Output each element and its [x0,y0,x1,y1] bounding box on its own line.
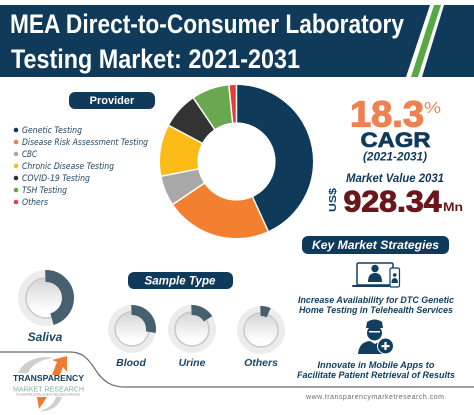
legend: provider [14,126,149,208]
heading: sample type [128,272,233,289]
stat: CAGR: 18.3 [350,94,424,134]
legend: provider: Genetic Testing [22,126,83,136]
legend: provider: COVID-19 Testing [22,174,91,184]
legend: provider: Others [22,198,49,208]
heading: key market strategies [302,236,449,254]
donut chart: provider share [159,83,294,233]
text: strategy two: Innovate in Mobile Apps to [318,360,435,371]
heading: provider: Provider [90,95,135,107]
stat: CAGR: CAGR [360,129,430,152]
heading: sample type: Sample Type [144,274,216,288]
icon: patient with plus badge [358,320,394,354]
logo: transparency market research [13,356,85,411]
text: strategy one: Increase Availability for DTC Genetic [298,295,455,306]
icon: telehealth laptop and phone [352,263,400,287]
gauge: blood [108,305,156,369]
gauge: others: Others [244,357,278,369]
title: Testing Market: 2021-2031 [11,44,300,74]
logo: transparency market research: TO INSPIRE INTELLIGENT DECISION MAKING [16,392,81,396]
gauge: saliva [18,270,74,344]
stat: market value [327,171,463,218]
legend: provider: TSH Testing [22,186,68,196]
legend: provider: Disease Risk Assessment Testing [22,138,149,148]
gauge: others [237,306,285,369]
logo: transparency market research: TRANSPARENCY [13,374,85,383]
gauge: blood: Blood [116,357,146,369]
stat: CAGR: (2021-2031) [363,152,427,164]
stat: CAGR: % [424,100,441,117]
stat: CAGR [350,94,441,164]
text: strategy two: Facilitate Patient Retrieval of Results [297,370,455,381]
stat: market value: Mn [443,200,463,214]
stat: market value: Market Value 2031 [346,171,444,185]
stat: market value: US$ [327,188,339,212]
heading: provider [69,92,155,109]
text: strategy one: Home Testing in Telehealth Services [299,305,453,316]
legend: provider: CBC [22,150,37,160]
gauge: urine [168,305,216,369]
title: MEA Direct-to-Consumer Laboratory [10,9,404,39]
legend: provider: Chronic Disease Testing [22,162,115,172]
stat: market value: 928.34 [344,186,442,218]
gauge: saliva: Saliva [28,330,63,344]
heading: key market strategies: Key Market Strategies [312,238,439,252]
logo: transparency market research: MARKET RESEARCH [13,384,84,394]
text: website url: www.transparencymarketresearch.com [305,394,444,401]
gauge: urine: Urine [179,357,206,369]
title banner [0,5,474,77]
